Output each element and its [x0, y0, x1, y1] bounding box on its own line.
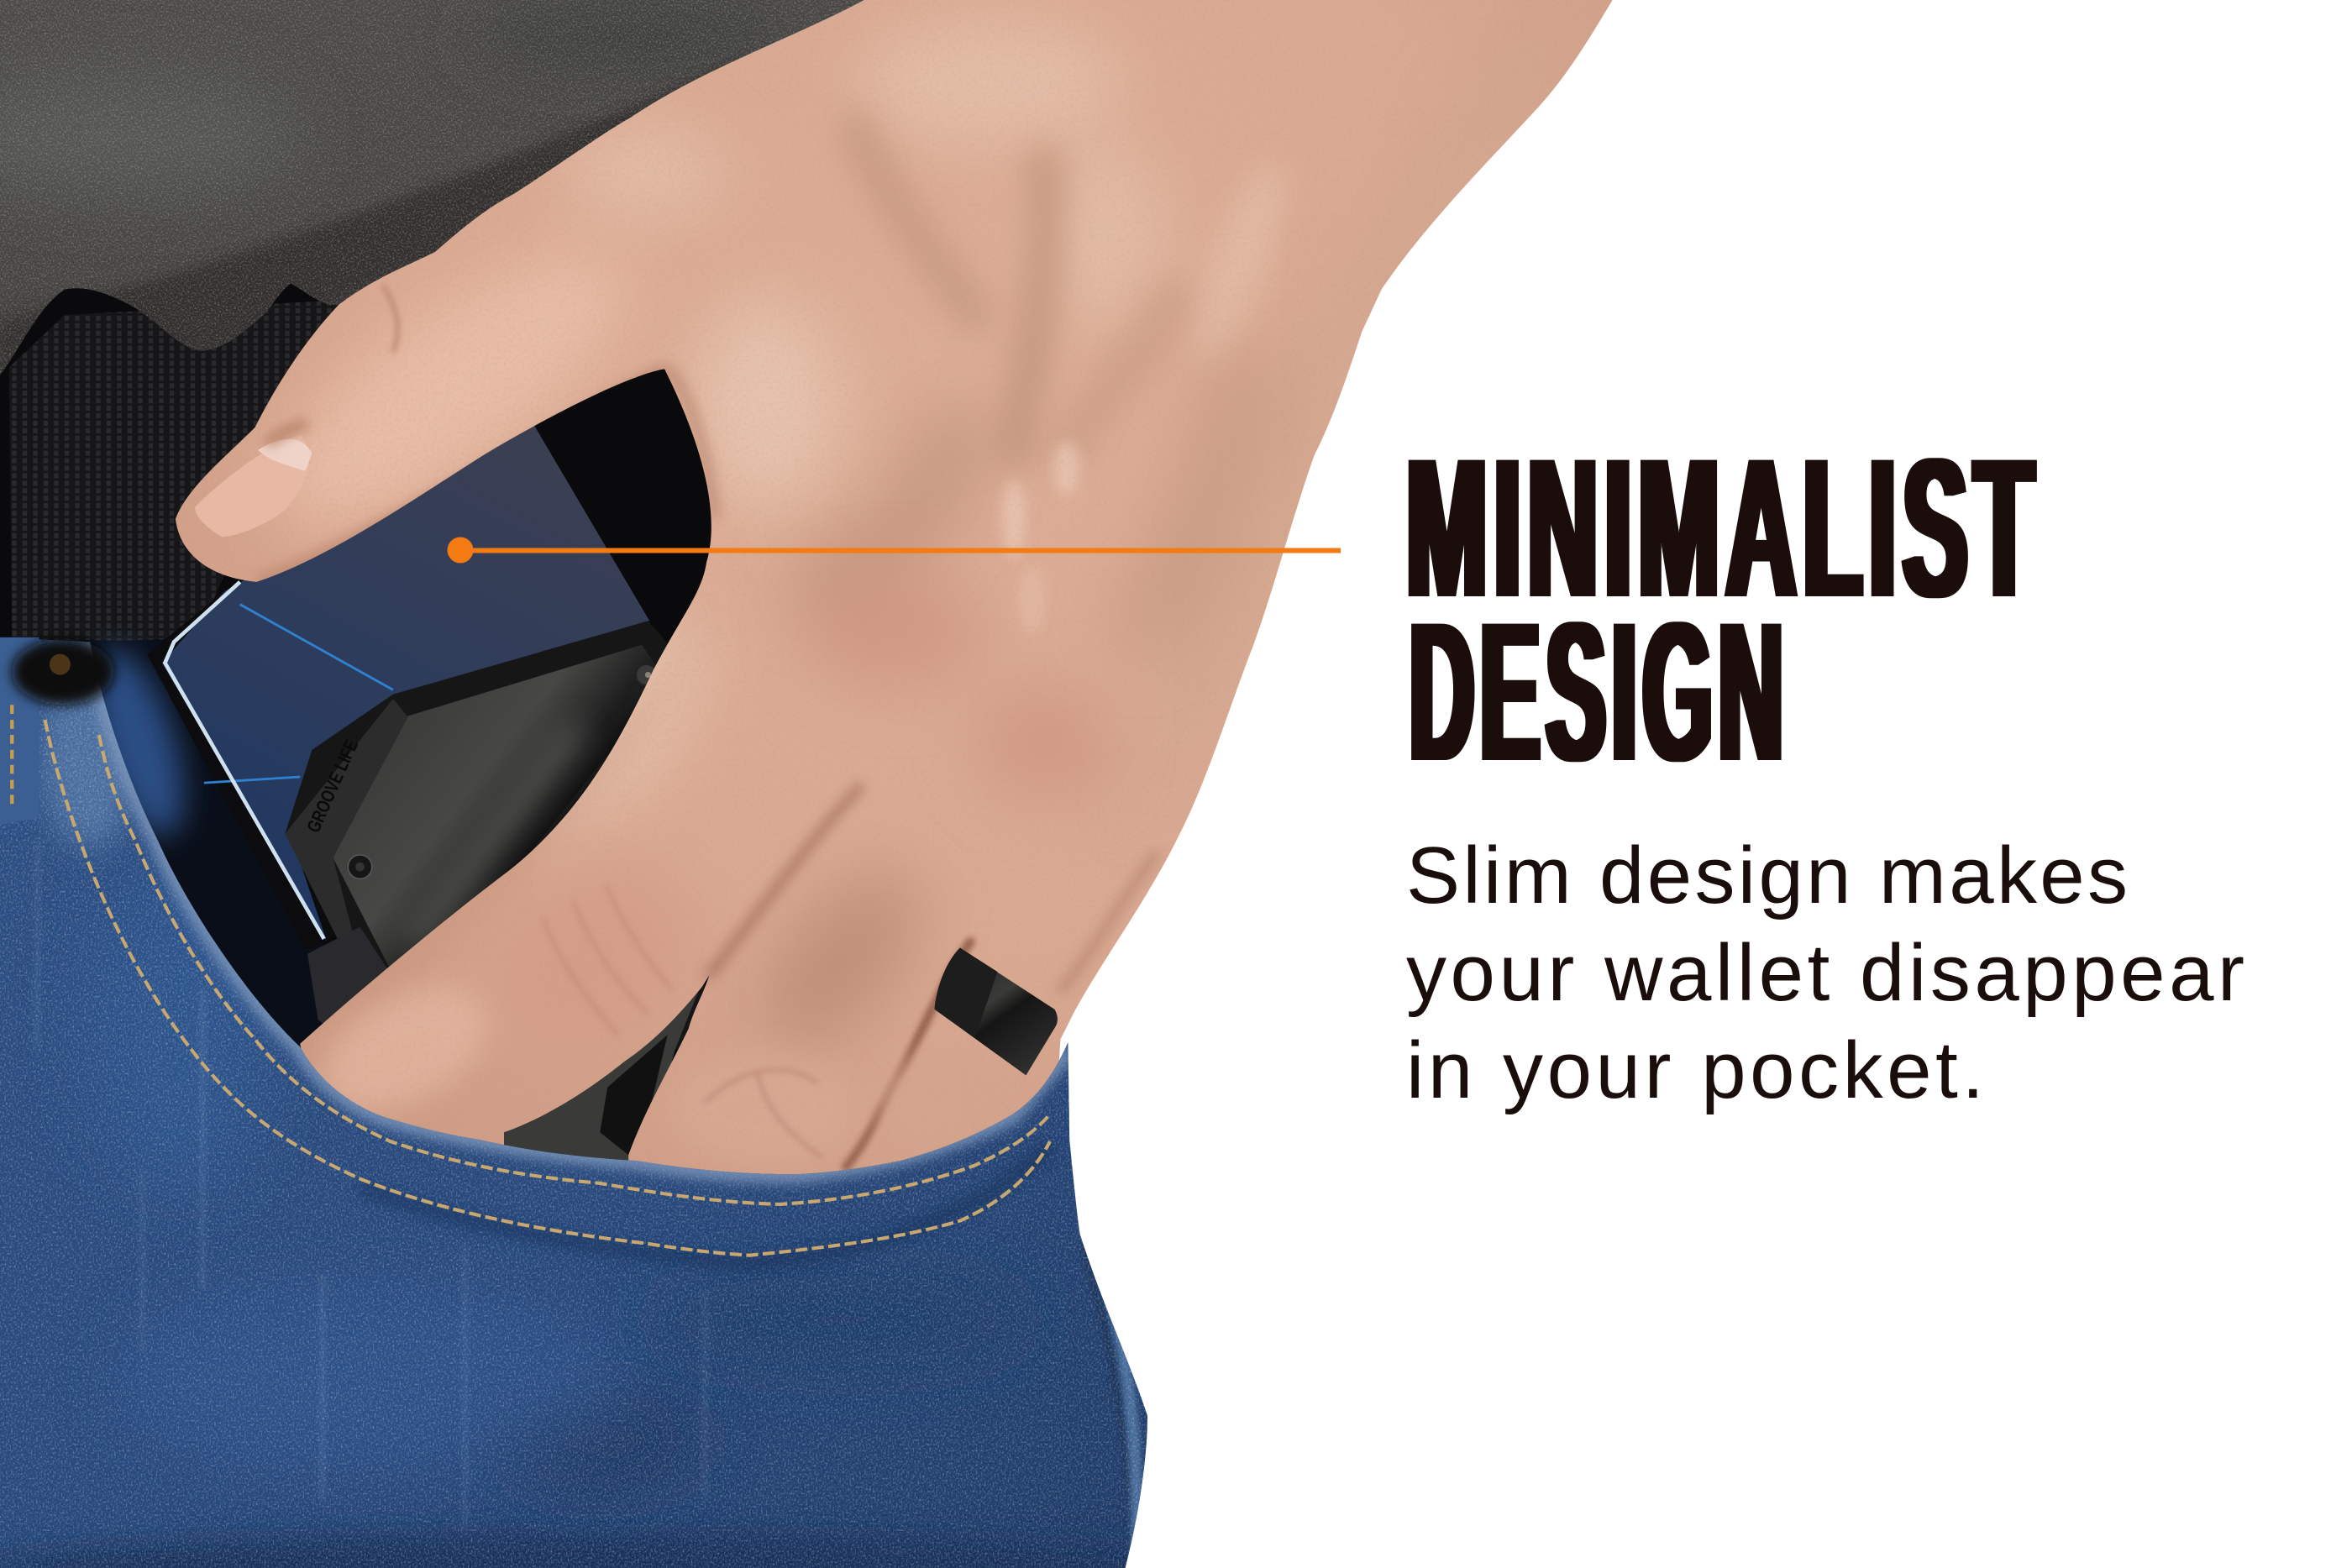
denim jeans: [0, 630, 1230, 1568]
pocket stitching: [45, 720, 1050, 1256]
body copy: Slim design makes: [1406, 831, 2128, 920]
callout leader line: [447, 538, 1341, 563]
ring finger knuckle: [880, 1060, 995, 1144]
screw, lower: [348, 855, 372, 878]
denim dark weave: [0, 630, 1170, 1568]
heading: [1406, 417, 2040, 803]
belt loop: [0, 637, 39, 825]
middle knuckle creases: [705, 1070, 822, 1158]
hand: [150, 0, 1650, 1214]
fingertip highlight: [302, 962, 508, 1137]
brushed metal body: [285, 621, 705, 1050]
middle knuckle: [672, 1056, 858, 1164]
callout dot: [447, 538, 474, 563]
body copy: in your pocket.: [1406, 1025, 1984, 1115]
black ring: [934, 948, 1058, 1075]
thumbnail: [195, 423, 312, 537]
body copy: your wallet disappear: [1406, 928, 2244, 1018]
pocket interior: [74, 638, 510, 1185]
tendon shadows: [825, 129, 1245, 630]
skin texture: [150, 0, 1650, 1214]
vein highlights: [1002, 441, 1080, 633]
heading: DESIGN: [1410, 581, 1789, 803]
reddish knuckles: [804, 570, 1111, 800]
middle finger shadow: [731, 845, 949, 1075]
brand engraving: GROOVE LIFE: [302, 737, 362, 836]
index fingertip knuckle: [455, 827, 729, 1093]
lower wallet clip: [600, 1035, 668, 1162]
denim weave: [0, 630, 1170, 1568]
wrist highlights: [461, 23, 1300, 867]
skin base: [150, 0, 1650, 1214]
index finger shadow: [294, 600, 705, 1044]
black belt webbing: [0, 255, 735, 1200]
knuckle crease: [382, 285, 397, 353]
denim shading: [0, 651, 1230, 1568]
product photo: hand placing wallet in jeans pocket: [0, 0, 1650, 1568]
worn pocket lip: [90, 642, 1068, 1174]
thumb crotch shadow: [664, 369, 714, 517]
metal card with blue print: [147, 420, 649, 951]
belt-loop stitch: [11, 705, 13, 810]
knuckle creases: [543, 885, 672, 1035]
elastic band: [307, 927, 399, 1035]
wallet: [147, 420, 705, 1185]
pocket fold shadow: [360, 1147, 1050, 1263]
rivet: [50, 654, 71, 675]
lower wallet edge: [495, 975, 705, 1185]
denim streaks: [38, 840, 705, 1529]
finger gap shadows: [710, 787, 1155, 1167]
callout line: [467, 548, 1341, 553]
grey t-shirt: [0, 0, 900, 390]
thumb highlight: [281, 254, 623, 539]
thumb under-shadow: [256, 369, 664, 582]
right forearm tone: [1250, 91, 1552, 653]
rivet shadow: [12, 639, 114, 705]
body copy: [1406, 831, 2244, 1115]
screw, upper: [636, 664, 657, 685]
